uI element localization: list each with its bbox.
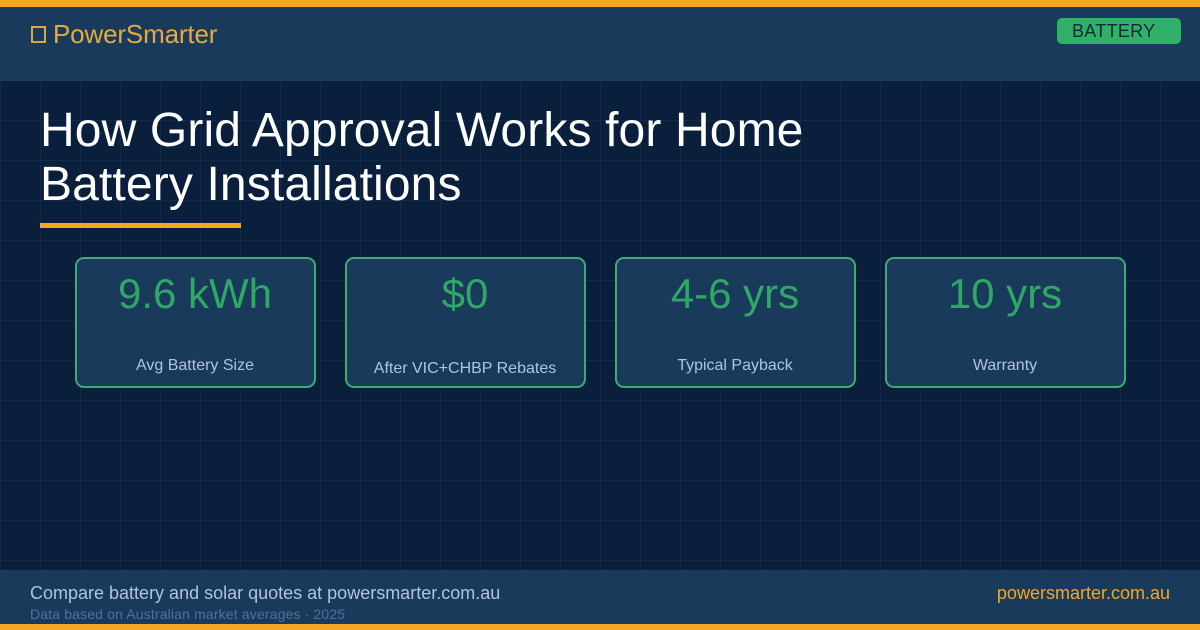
footer data note: Data based on Australian market averages · 2025 <box>30 606 345 622</box>
badge label: BATTERY <box>1072 21 1155 41</box>
stat card: warranty <box>885 257 1126 388</box>
bottom accent bar <box>0 624 1200 630</box>
brand name: PowerSmarter <box>53 19 217 49</box>
title <box>40 104 804 211</box>
stat label: Avg Battery Size <box>136 357 254 374</box>
stat card: battery size <box>75 257 316 388</box>
stat value: 10 yrs <box>948 270 1062 317</box>
header band <box>0 0 1200 81</box>
stat label: After VIC+CHBP Rebates <box>374 360 556 377</box>
footer call to action: Compare battery and solar quotes at powersmarter.com.au <box>30 583 500 603</box>
badge: battery <box>1057 18 1181 44</box>
stat label: Warranty <box>973 357 1037 374</box>
stat card: rebates <box>345 257 586 388</box>
icon: missing glyph box <box>31 26 46 43</box>
stat value: 4-6 yrs <box>671 270 799 317</box>
title: How Grid Approval Works for Home <box>40 104 804 157</box>
stat card: payback <box>615 257 856 388</box>
title: Battery Installations <box>40 158 462 211</box>
footer website link: powersmarter.com.au <box>997 583 1170 603</box>
title underline <box>40 223 241 228</box>
stat value: 9.6 kWh <box>118 270 272 317</box>
footer band <box>0 570 1200 630</box>
top accent bar <box>0 0 1200 7</box>
stat value: $0 <box>442 270 488 317</box>
stat label: Typical Payback <box>677 357 793 374</box>
